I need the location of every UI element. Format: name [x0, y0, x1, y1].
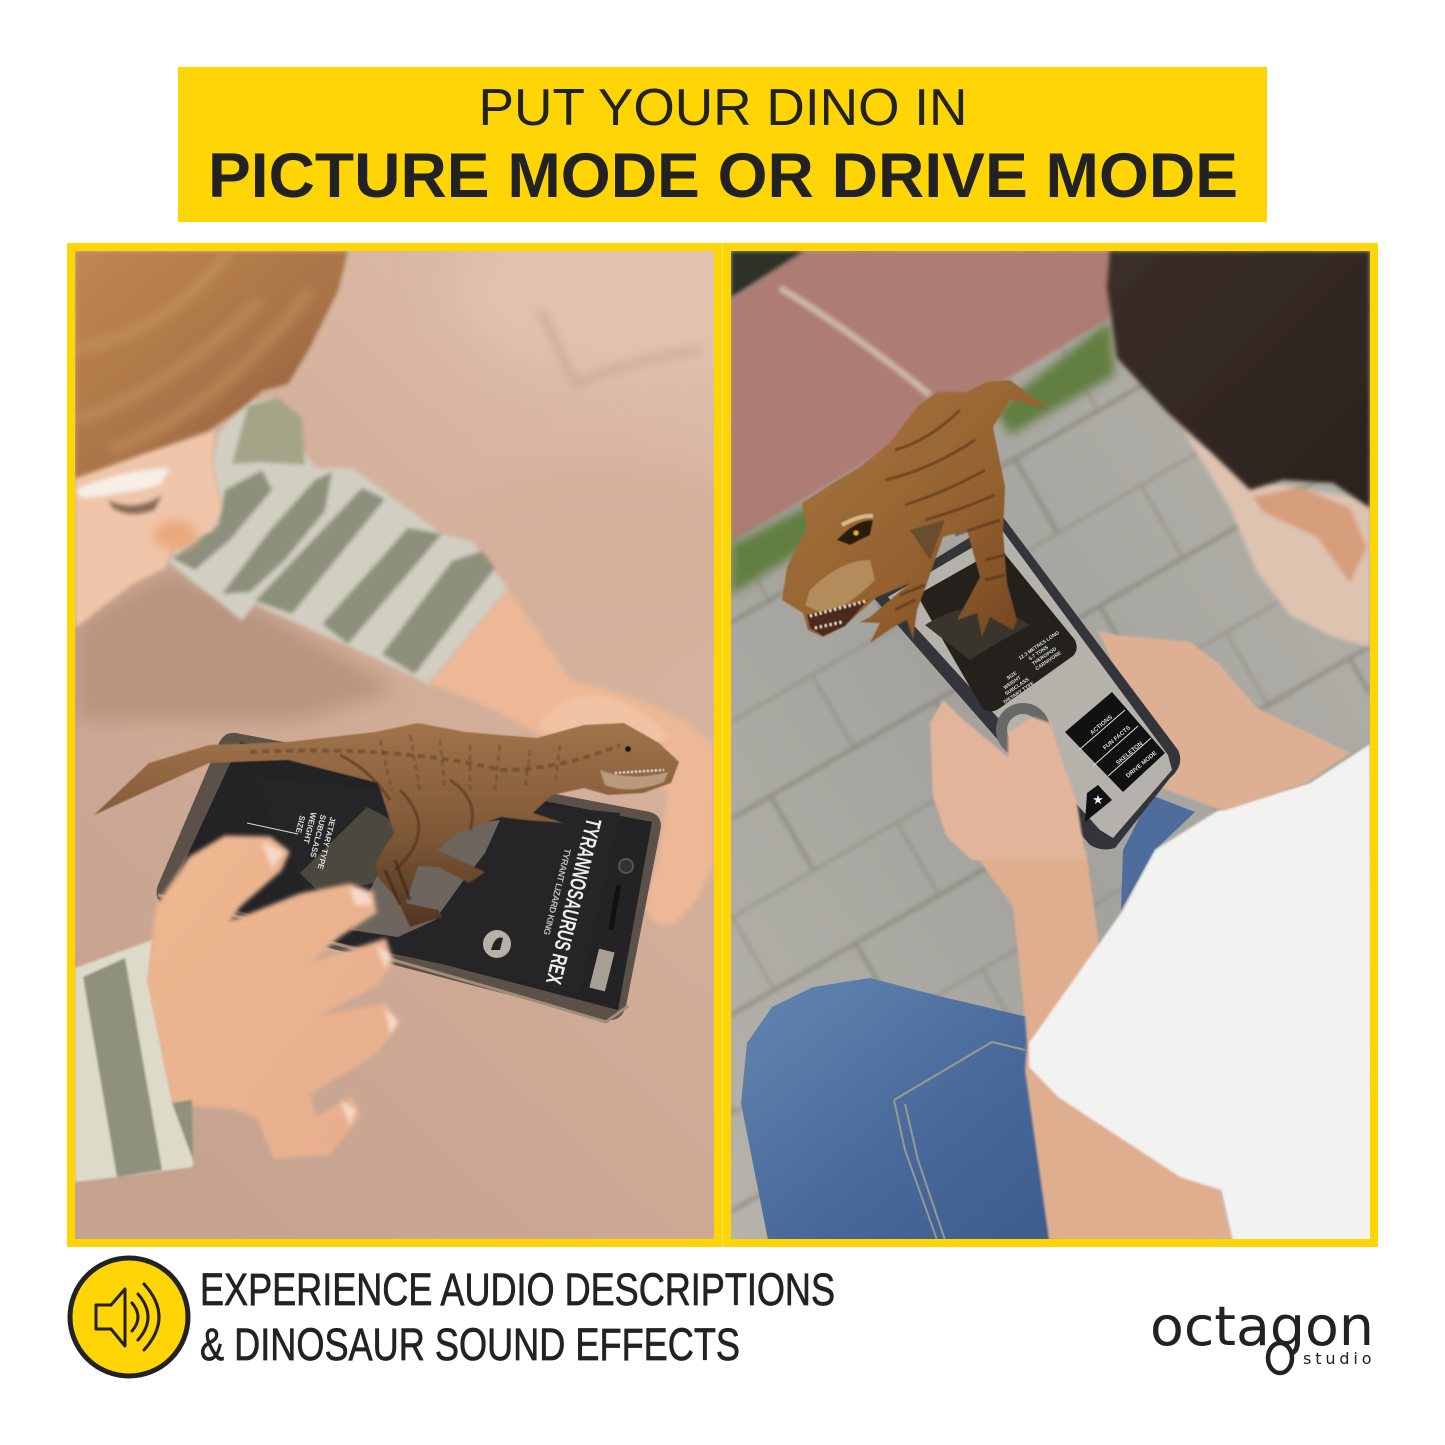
phone stats: SIZE — [294, 815, 307, 835]
brick curb — [731, 251, 1115, 542]
audio caption — [200, 1264, 835, 1370]
phone stats: SUBCLASS — [308, 814, 328, 859]
pavement background — [731, 251, 1370, 1239]
heading line 2: PICTURE MODE OR DRIVE MODE — [208, 141, 1238, 211]
boy's face and ear — [1183, 430, 1370, 647]
audio icon — [70, 1258, 188, 1376]
phone — [157, 733, 661, 1022]
child's hair — [75, 251, 348, 478]
phone menu buttons — [1065, 692, 1165, 792]
phone title: TYRANNOSAURUS REX — [541, 816, 606, 987]
right hand — [1098, 631, 1350, 811]
boy's arm — [972, 850, 1233, 1240]
phone info card: 12.3 METRES LONG — [1018, 630, 1061, 662]
octagon studio logo: octagon — [1150, 1295, 1374, 1358]
T-rex standing on phone — [782, 380, 1048, 643]
audio caption: EXPERIENCE AUDIO DESCRIPTIONS — [200, 1264, 835, 1315]
child's face — [75, 431, 222, 628]
panel: drive mode photo — [731, 251, 1372, 1242]
phone info card: DIETARY TYPE — [1003, 680, 1036, 706]
phone info card — [917, 548, 1077, 712]
phone stats: JETARY TYPE — [315, 816, 337, 871]
boy's white shirt — [1029, 744, 1372, 1242]
smartphone — [873, 517, 1180, 849]
boy's hair — [1107, 251, 1370, 508]
favourites button — [1085, 785, 1112, 822]
child's arm and hand on right — [428, 588, 714, 925]
child's left hand — [147, 837, 398, 1157]
striped sleeve — [168, 398, 508, 684]
T-rex on phone — [94, 723, 679, 927]
sofa background — [75, 251, 714, 1239]
phone info card: 6-7 TONS — [1028, 644, 1050, 662]
phone stats: WEIGHT — [301, 811, 318, 844]
phone subtitle: TYRANT LIZARD KING — [541, 848, 573, 937]
phone info card: WEIGHT — [1002, 675, 1022, 691]
phone info card: SIZE — [1006, 670, 1019, 682]
phone info card: SUBCLASS — [1004, 676, 1031, 697]
phone menu buttons: ACTIONS — [1089, 715, 1114, 737]
jeans pocket stitching — [894, 1042, 1025, 1240]
header banner — [178, 67, 1267, 222]
phone info card: CARNIVORE — [1034, 650, 1063, 672]
grass — [731, 320, 1115, 595]
panel: picture mode photo — [75, 251, 714, 1239]
phone info card: THEROPOD — [1031, 646, 1058, 667]
phone menu buttons: DRIVE MODE — [1125, 750, 1158, 780]
drive mode joystick — [996, 703, 1050, 757]
phone menu buttons: SKELETON — [1115, 741, 1144, 767]
panel: yellow frames — [67, 243, 1378, 1247]
left hand with thumb — [930, 700, 1086, 860]
octagon studio logo: studio — [1303, 1349, 1374, 1368]
striped cuff — [75, 940, 193, 1182]
phone menu buttons: FUN FACTS — [1102, 725, 1132, 752]
jeans — [741, 795, 1195, 1240]
favourites button: ★ — [1092, 793, 1104, 808]
heading line 1: PUT YOUR DINO IN — [478, 79, 968, 137]
audio caption: & DINOSAUR SOUND EFFECTS — [200, 1319, 740, 1370]
